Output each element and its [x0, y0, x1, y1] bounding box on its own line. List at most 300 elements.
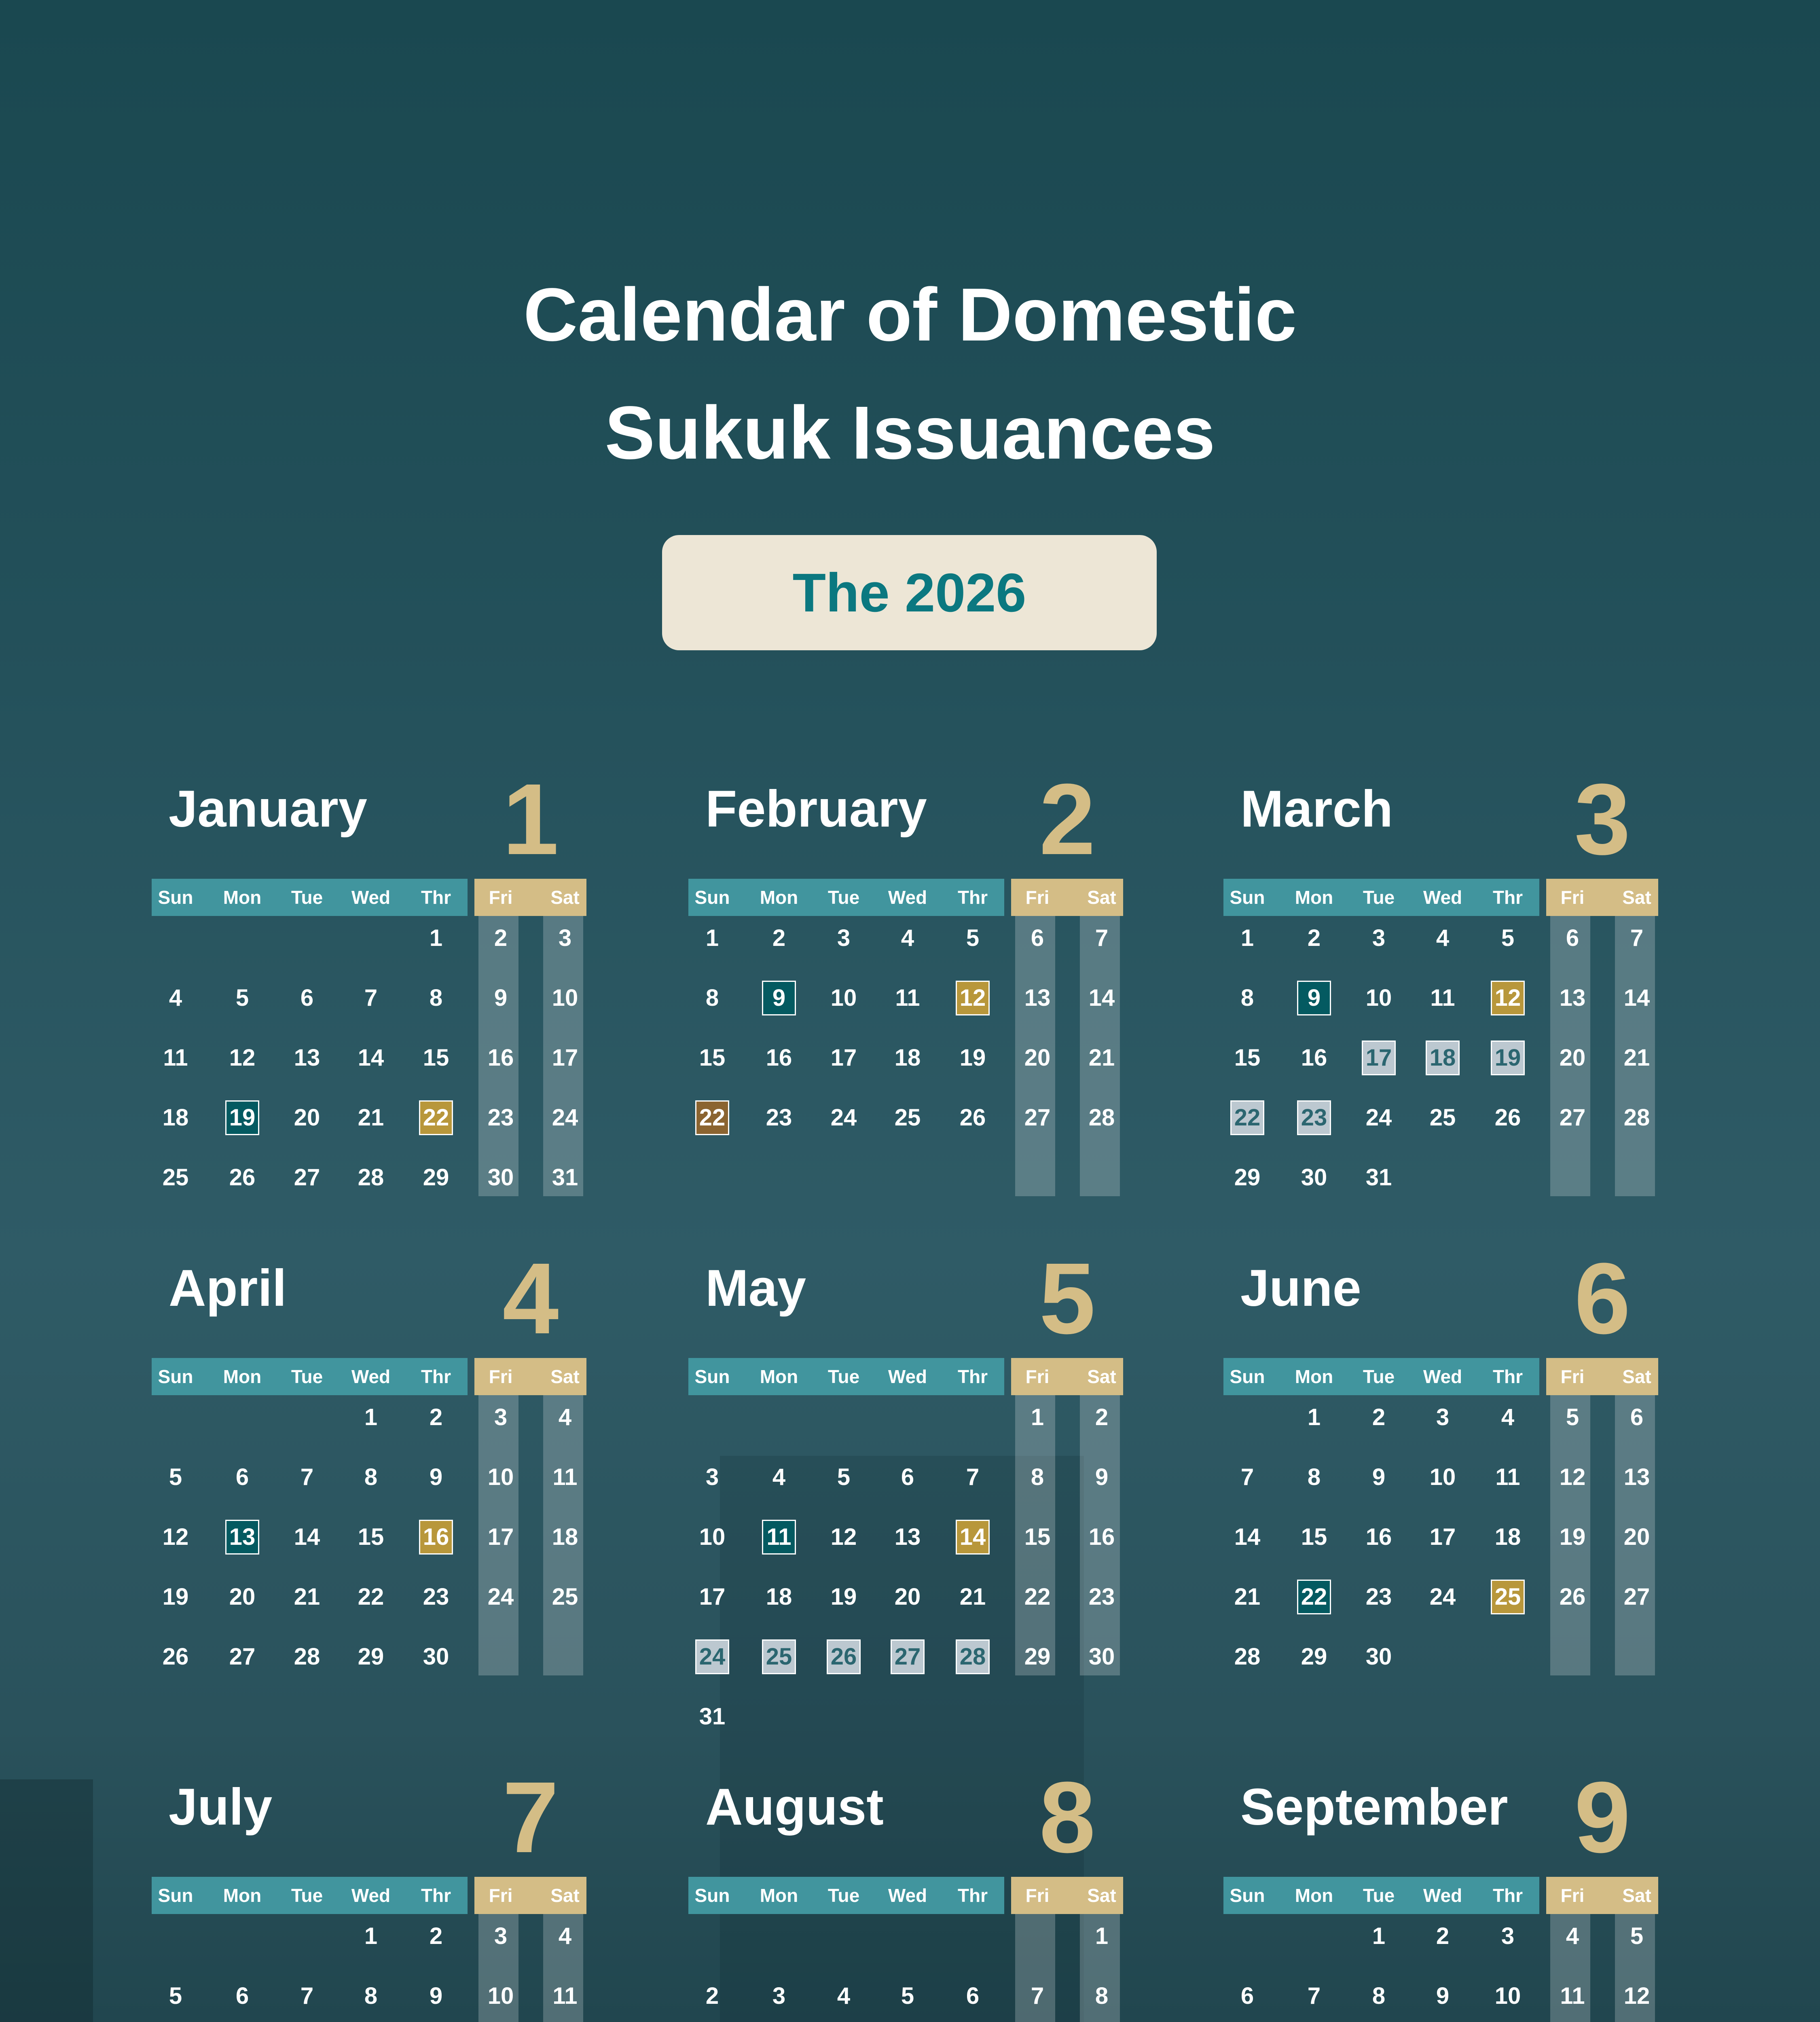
month: May: Fri	[1026, 1366, 1049, 1387]
month: March: 12	[1495, 985, 1521, 1011]
month: June: 22	[1301, 1584, 1327, 1610]
month: February: 1	[706, 925, 719, 951]
month: April: 1	[364, 1404, 377, 1430]
text: 5	[1039, 1242, 1096, 1355]
month: February: 23	[766, 1104, 792, 1131]
month: March: 6	[1566, 925, 1579, 951]
month: March: 7	[1630, 925, 1643, 951]
month: April: Wed	[351, 1366, 390, 1387]
month: June: 25	[1495, 1584, 1521, 1610]
month: January: 22	[423, 1104, 449, 1131]
month: May: 14	[960, 1524, 986, 1550]
month: May: 16	[1089, 1524, 1115, 1550]
month: March: 3	[1372, 925, 1385, 951]
month: June: 5	[1566, 1404, 1579, 1430]
month: September: Sun	[1230, 1885, 1265, 1906]
year badge: The 2026	[793, 562, 1026, 623]
text: September	[1240, 1778, 1508, 1836]
month: May: 6	[901, 1464, 914, 1490]
month: September: 11	[1560, 1983, 1585, 2009]
month: April: 13	[229, 1524, 255, 1550]
month: February: 3	[837, 925, 850, 951]
month: April: 27	[229, 1643, 255, 1670]
text: January	[169, 780, 367, 838]
month: January: 13	[294, 1045, 320, 1071]
month: February: 21	[1089, 1045, 1115, 1071]
month: January: 21	[358, 1104, 384, 1131]
month: June: 17	[1430, 1524, 1456, 1550]
month: June: 14	[1234, 1524, 1260, 1550]
month: June	[1223, 1358, 1660, 1762]
month: July: 10	[488, 1983, 514, 2009]
month: January: 29	[423, 1164, 449, 1191]
month: August: 1	[1095, 1923, 1108, 1949]
month: March: Thr	[1493, 887, 1523, 908]
month: January: 31	[552, 1164, 578, 1191]
month: March: Wed	[1423, 887, 1462, 908]
month: April: 16	[423, 1524, 449, 1550]
month: August: Wed	[888, 1885, 927, 1906]
month: January: Wed	[351, 887, 390, 908]
month: February: 14	[1089, 985, 1115, 1011]
month: January: 27	[294, 1164, 320, 1191]
month: March: 5	[1501, 925, 1514, 951]
month: August: 3	[772, 1983, 785, 2009]
month: May: 3	[706, 1464, 719, 1490]
month: February: 12	[960, 985, 986, 1011]
month: May: 25	[766, 1643, 792, 1670]
month: March: 31	[1366, 1164, 1392, 1191]
month: August: Mon	[760, 1885, 798, 1906]
month: April: 11	[552, 1464, 578, 1490]
month: June: 3	[1436, 1404, 1449, 1430]
month: March	[1223, 879, 1660, 1283]
month: March: 13	[1560, 985, 1585, 1011]
month: June: 10	[1430, 1464, 1456, 1490]
month: June: Tue	[1363, 1366, 1395, 1387]
month: February: 17	[831, 1045, 857, 1071]
text: 4	[502, 1242, 559, 1355]
month: August	[688, 1877, 1125, 2022]
month: September: 2	[1436, 1923, 1449, 1949]
month: March: 23	[1301, 1104, 1327, 1131]
month: April: 10	[488, 1464, 514, 1490]
month: July: 2	[430, 1923, 442, 1949]
month: March: 25	[1430, 1104, 1456, 1131]
month: January: 16	[488, 1045, 514, 1071]
month: April: 24	[488, 1584, 514, 1610]
month: May: 26	[831, 1643, 857, 1670]
month: April: 18	[552, 1524, 578, 1550]
month: March: 16	[1301, 1045, 1327, 1071]
month: May: 18	[766, 1584, 792, 1610]
month: May: 29	[1024, 1643, 1050, 1670]
month: January: 5	[236, 985, 249, 1011]
month: July: 7	[301, 1983, 313, 2009]
month: February: 26	[960, 1104, 986, 1131]
month: March: 30	[1301, 1164, 1327, 1191]
month: September: 5	[1630, 1923, 1643, 1949]
month: August: Sun	[695, 1885, 730, 1906]
month: February: 6	[1031, 925, 1044, 951]
text: 1	[502, 763, 559, 876]
month: January: 7	[364, 985, 377, 1011]
month: April: 15	[358, 1524, 384, 1550]
month: February: 13	[1024, 985, 1050, 1011]
month: May: Mon	[760, 1366, 798, 1387]
month: April: 19	[163, 1584, 188, 1610]
month: January: 14	[358, 1045, 384, 1071]
month: April: Mon	[223, 1366, 261, 1387]
month: June: 23	[1366, 1584, 1392, 1610]
text: August	[705, 1778, 884, 1836]
month: June: 16	[1366, 1524, 1392, 1550]
month: May: 19	[831, 1584, 857, 1610]
month: July: Wed	[351, 1885, 390, 1906]
month: April: 6	[236, 1464, 249, 1490]
month: February: Wed	[888, 887, 927, 908]
background: central tower	[720, 1456, 1084, 2022]
month: July: 3	[494, 1923, 507, 1949]
month: February: 4	[901, 925, 914, 951]
text: 2	[1039, 763, 1096, 876]
month: January: 12	[229, 1045, 255, 1071]
month: August: 8	[1095, 1983, 1108, 2009]
month: March: 11	[1430, 985, 1455, 1011]
month: July: 4	[559, 1923, 571, 1949]
month: June: 30	[1366, 1643, 1392, 1670]
month: June: 11	[1495, 1464, 1520, 1490]
month: June: Mon	[1295, 1366, 1333, 1387]
month: January: Tue	[291, 887, 323, 908]
month: June: Thr	[1493, 1366, 1523, 1387]
month: June: 19	[1560, 1524, 1585, 1550]
month: April: Tue	[291, 1366, 323, 1387]
month: May: 9	[1095, 1464, 1108, 1490]
month: May: 12	[831, 1524, 857, 1550]
month: September: Fri	[1561, 1885, 1584, 1906]
month: March: Mon	[1295, 887, 1333, 908]
month: February: 20	[1024, 1045, 1050, 1071]
month: January: Thr	[421, 887, 451, 908]
month: January: 6	[301, 985, 313, 1011]
month: January: 17	[552, 1045, 578, 1071]
month: September: 10	[1495, 1983, 1521, 2009]
month: March: 8	[1241, 985, 1254, 1011]
month: June: 24	[1430, 1584, 1456, 1610]
month: June: 21	[1234, 1584, 1260, 1610]
month: March: 1	[1241, 925, 1254, 951]
month: April: 3	[494, 1404, 507, 1430]
month: March: Sun	[1230, 887, 1265, 908]
month: January: 15	[423, 1045, 449, 1071]
month: June: Sat	[1622, 1366, 1651, 1387]
month: January: 19	[229, 1104, 255, 1131]
month: July	[152, 1877, 588, 2022]
month: March: Sat	[1622, 887, 1651, 908]
month: May: 22	[1024, 1584, 1050, 1610]
month: August: 2	[706, 1983, 719, 2009]
text: 9	[1574, 1761, 1631, 1874]
month: March: 17	[1366, 1045, 1392, 1071]
month: May: 20	[895, 1584, 921, 1610]
month: February: Sun	[695, 887, 730, 908]
month: January: 8	[430, 985, 442, 1011]
text: June	[1240, 1259, 1361, 1317]
month: February: 28	[1089, 1104, 1115, 1131]
month: May: Sat	[1087, 1366, 1116, 1387]
month: June: 2	[1372, 1404, 1385, 1430]
month: May: 24	[699, 1643, 725, 1670]
month: February: 15	[699, 1045, 725, 1071]
month: January: 9	[494, 985, 507, 1011]
month: January: 28	[358, 1164, 384, 1191]
month: September: 3	[1501, 1923, 1514, 1949]
month: February: 9	[772, 985, 785, 1011]
month: April: Sat	[550, 1366, 580, 1387]
month: May	[688, 1358, 1125, 1762]
month: April: 30	[423, 1643, 449, 1670]
month: August: 4	[837, 1983, 850, 2009]
month: April: Sun	[158, 1366, 193, 1387]
month: April: 14	[294, 1524, 320, 1550]
month: March: 15	[1234, 1045, 1260, 1071]
month: January: 18	[163, 1104, 188, 1131]
text: February	[705, 780, 927, 838]
month: February: 10	[831, 985, 857, 1011]
month: September: 12	[1624, 1983, 1650, 2009]
month: July: 6	[236, 1983, 249, 2009]
month: May: 4	[772, 1464, 785, 1490]
month: May: 8	[1031, 1464, 1044, 1490]
month: March: 14	[1624, 985, 1650, 1011]
month: June: Sun	[1230, 1366, 1265, 1387]
month: April: 22	[358, 1584, 384, 1610]
month: April: 2	[430, 1404, 442, 1430]
month: August: Tue	[828, 1885, 859, 1906]
month: February: 24	[831, 1104, 857, 1131]
month: January: 24	[552, 1104, 578, 1131]
month: July: Thr	[421, 1885, 451, 1906]
month: September: 7	[1308, 1983, 1321, 2009]
text: 7	[502, 1761, 559, 1874]
month: May: 21	[960, 1584, 986, 1610]
text: March	[1240, 780, 1393, 838]
month: April: 29	[358, 1643, 384, 1670]
month: May: 23	[1089, 1584, 1115, 1610]
month: January: 2	[494, 925, 507, 951]
text: 6	[1574, 1242, 1631, 1355]
month: September: Thr	[1493, 1885, 1523, 1906]
month: June: 20	[1624, 1524, 1650, 1550]
month: May: 10	[699, 1524, 725, 1550]
month: April: 7	[301, 1464, 313, 1490]
text: 3	[1574, 763, 1631, 876]
month: May: 27	[895, 1643, 921, 1670]
month: February: 16	[766, 1045, 792, 1071]
month: February: Sat	[1087, 887, 1116, 908]
month: August: 7	[1031, 1983, 1044, 2009]
month: February: 18	[895, 1045, 921, 1071]
month: January: 10	[552, 985, 578, 1011]
month: April: 12	[163, 1524, 188, 1550]
month: June: 27	[1624, 1584, 1650, 1610]
month: June: 15	[1301, 1524, 1327, 1550]
month: March: 20	[1560, 1045, 1585, 1071]
month: July: Fri	[489, 1885, 512, 1906]
month: June: 18	[1495, 1524, 1521, 1550]
month: June: 7	[1241, 1464, 1254, 1490]
month: March: 24	[1366, 1104, 1392, 1131]
month: September	[1223, 1877, 1660, 2022]
title: Calendar of Domestic	[523, 273, 1297, 357]
month: April: Thr	[421, 1366, 451, 1387]
month: July: 5	[169, 1983, 182, 2009]
month: January: 25	[163, 1164, 188, 1191]
month: May: 13	[895, 1524, 921, 1550]
month: January: 11	[163, 1045, 188, 1071]
month: March: Fri	[1561, 887, 1584, 908]
month: March: 21	[1624, 1045, 1650, 1071]
month: January: Sun	[158, 887, 193, 908]
month: February: Fri	[1026, 887, 1049, 908]
month: May: 2	[1095, 1404, 1108, 1430]
month: April	[152, 1358, 588, 1762]
month: February	[688, 879, 1125, 1283]
month: January: 4	[169, 985, 182, 1011]
month: March: 29	[1234, 1164, 1260, 1191]
month: February: 2	[772, 925, 785, 951]
year badge	[662, 535, 1157, 650]
title line 2: Sukuk Issuances	[605, 391, 1215, 475]
month: February: Tue	[828, 887, 859, 908]
month: May: 31	[699, 1703, 725, 1730]
month: January: Fri	[489, 887, 512, 908]
month: September: 4	[1566, 1923, 1579, 1949]
month: September: Tue	[1363, 1885, 1395, 1906]
month: April: 28	[294, 1643, 320, 1670]
month: June: 28	[1234, 1643, 1260, 1670]
month: March: 10	[1366, 985, 1392, 1011]
month: May: 7	[966, 1464, 979, 1490]
month: September: 1	[1372, 1923, 1385, 1949]
month: April: 23	[423, 1584, 449, 1610]
month: April: 5	[169, 1464, 182, 1490]
month: April: 26	[163, 1643, 188, 1670]
month: March: 28	[1624, 1104, 1650, 1131]
month: February: 22	[699, 1104, 725, 1131]
month: July: Sun	[158, 1885, 193, 1906]
month: June: 13	[1624, 1464, 1650, 1490]
month: August: 5	[901, 1983, 914, 2009]
month: July: 9	[430, 1983, 442, 2009]
month: September: 8	[1372, 1983, 1385, 2009]
month: February: 5	[966, 925, 979, 951]
month: January: Sat	[550, 887, 580, 908]
month: February: 27	[1024, 1104, 1050, 1131]
month: June: 4	[1501, 1404, 1514, 1430]
month: June: Wed	[1423, 1366, 1462, 1387]
text: April	[169, 1259, 287, 1317]
month: April: 17	[488, 1524, 514, 1550]
month: September: Mon	[1295, 1885, 1333, 1906]
month: January: 30	[488, 1164, 514, 1191]
month: February: 7	[1095, 925, 1108, 951]
month: January: 3	[559, 925, 571, 951]
month: March: 27	[1560, 1104, 1585, 1131]
month: May: 28	[960, 1643, 986, 1670]
month: April: 8	[364, 1464, 377, 1490]
month: June: Fri	[1561, 1366, 1584, 1387]
month: August: Fri	[1026, 1885, 1049, 1906]
month: January: 1	[430, 925, 442, 951]
month: January	[152, 879, 588, 1283]
text: 8	[1039, 1761, 1096, 1874]
month: September: Wed	[1423, 1885, 1462, 1906]
month: March: 26	[1495, 1104, 1521, 1131]
month: January: Mon	[223, 887, 261, 908]
month: February: Thr	[958, 887, 988, 908]
month: September: 9	[1436, 1983, 1449, 2009]
month: March: 9	[1308, 985, 1321, 1011]
text: May	[705, 1259, 806, 1317]
month: July: Mon	[223, 1885, 261, 1906]
month: May: 1	[1031, 1404, 1044, 1430]
month: July: 11	[552, 1983, 578, 2009]
month: February: 19	[960, 1045, 986, 1071]
month: June: 6	[1630, 1404, 1643, 1430]
month: June: 9	[1372, 1464, 1385, 1490]
month: January: 20	[294, 1104, 320, 1131]
month: May: Wed	[888, 1366, 927, 1387]
text: July	[169, 1778, 272, 1836]
month: August: Thr	[958, 1885, 988, 1906]
month: February: 25	[895, 1104, 921, 1131]
month: May: 5	[837, 1464, 850, 1490]
month: March: 2	[1308, 925, 1321, 951]
month: May: 15	[1024, 1524, 1050, 1550]
month: July: Sat	[550, 1885, 580, 1906]
month: June: 26	[1560, 1584, 1585, 1610]
month: May: 30	[1089, 1643, 1115, 1670]
month: March: Tue	[1363, 887, 1395, 908]
month: July: Tue	[291, 1885, 323, 1906]
month: May: Tue	[828, 1366, 859, 1387]
month: February: 8	[706, 985, 719, 1011]
month: July: 1	[364, 1923, 377, 1949]
month: April: 4	[559, 1404, 571, 1430]
month: January: 23	[488, 1104, 514, 1131]
month: May: Sun	[695, 1366, 730, 1387]
month: June: 1	[1308, 1404, 1321, 1430]
month: September: Sat	[1622, 1885, 1651, 1906]
month: May: 11	[766, 1524, 791, 1550]
background: building silhouettes	[0, 1779, 93, 2022]
month: March: 18	[1430, 1045, 1456, 1071]
month: February: Mon	[760, 887, 798, 908]
month: March: 4	[1436, 925, 1449, 951]
month: April: 25	[552, 1584, 578, 1610]
month: August: 6	[966, 1983, 979, 2009]
month: July: 8	[364, 1983, 377, 2009]
month: June: 29	[1301, 1643, 1327, 1670]
month: April: 20	[229, 1584, 255, 1610]
month: April: 21	[294, 1584, 320, 1610]
month: September: 6	[1241, 1983, 1254, 2009]
month: February: 11	[895, 985, 920, 1011]
month: June: 12	[1560, 1464, 1585, 1490]
month: April: Fri	[489, 1366, 512, 1387]
